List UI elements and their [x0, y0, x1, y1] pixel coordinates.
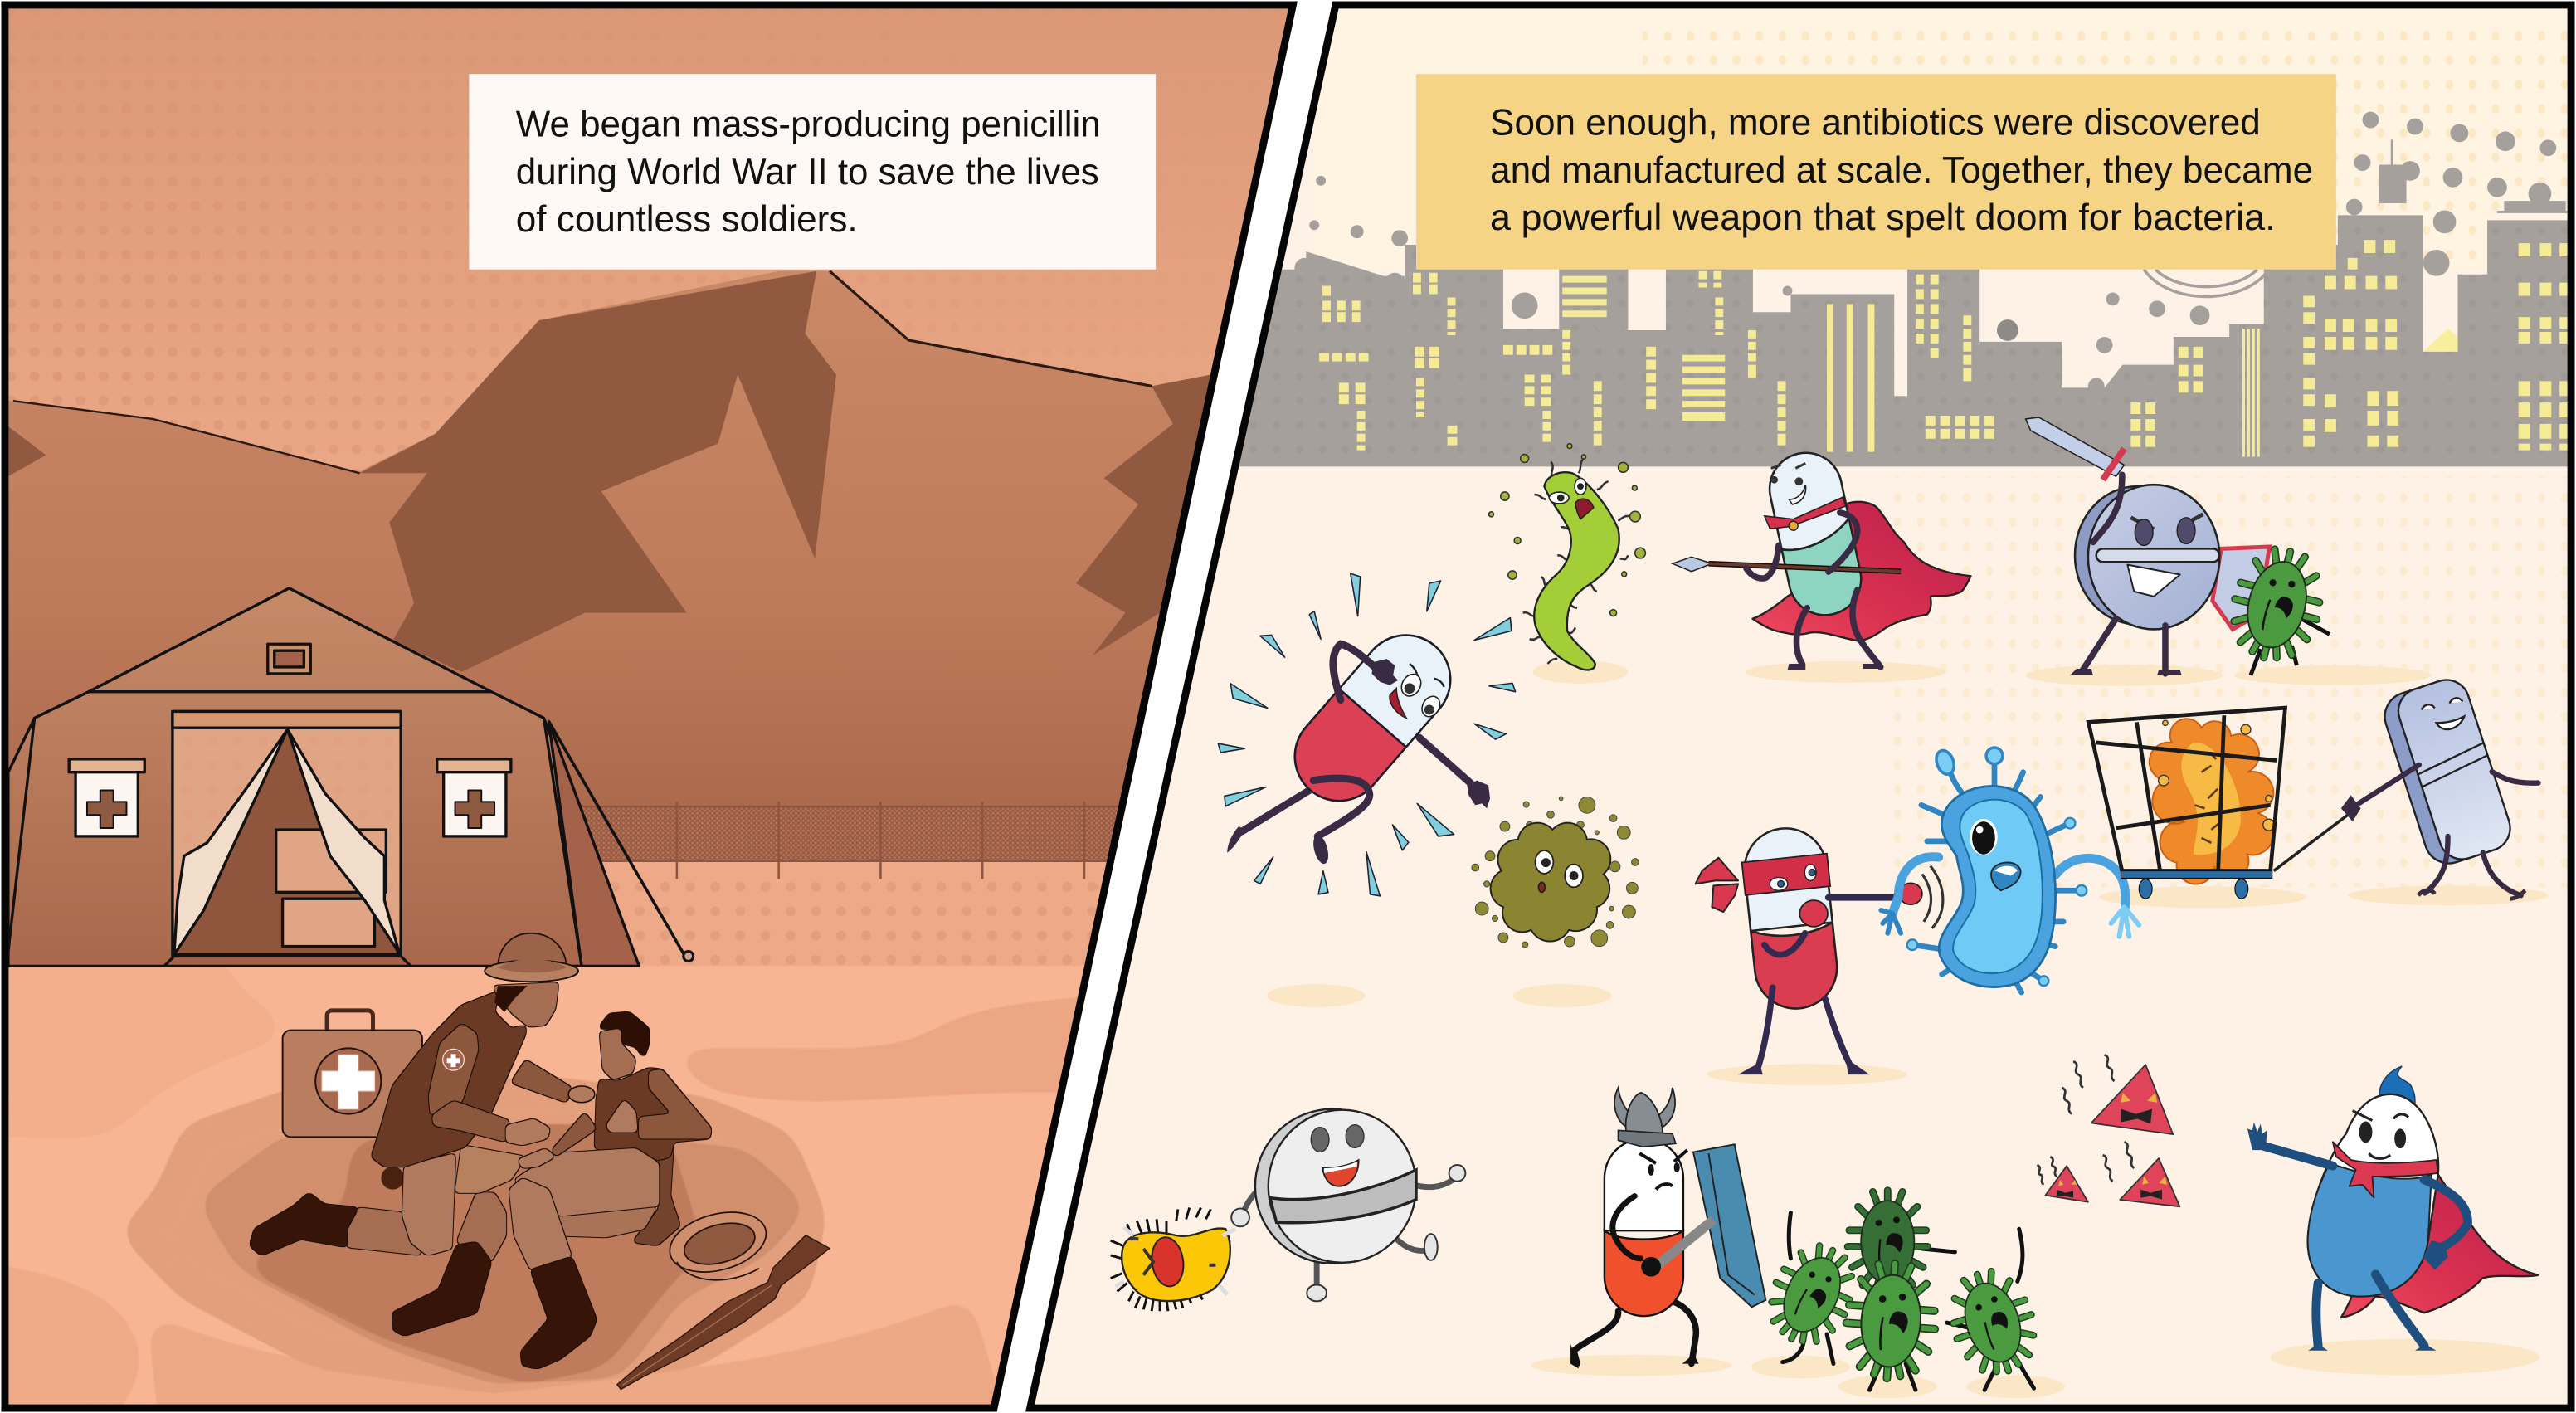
face: [2127, 514, 2203, 597]
green germ left: [1757, 1235, 1867, 1355]
foreground sand: [8, 966, 1084, 1405]
limbs: [1244, 1176, 1458, 1289]
helmet: [1614, 1088, 1676, 1147]
caption text: a powerful weapon that spelt doom for bacteria.: [1490, 197, 2276, 238]
sky with halftone dots: [0, 0, 1298, 493]
hands and shoes: [1231, 1165, 1465, 1301]
door: [164, 711, 411, 966]
character: viking capsule with shield: [1570, 1088, 1765, 1369]
city skyline: [1215, 112, 2576, 466]
limbs: [1758, 898, 1897, 1068]
tablet body: [2379, 674, 2516, 870]
caption text: [1490, 102, 2313, 238]
character: olive germ: [1472, 797, 1639, 948]
wiggle lines: [2037, 1055, 2134, 1185]
character: green rod bacterium: [1488, 444, 1645, 670]
particles: [1488, 444, 1645, 616]
tent body: [8, 588, 639, 966]
tent vent: [268, 644, 310, 674]
character: spear capsule with cape: [1673, 446, 1970, 670]
tablet body: [2075, 485, 2219, 629]
spikes and antennae: [1907, 748, 2087, 992]
faces: [2057, 1093, 2167, 1200]
germ legs: [1783, 1212, 2034, 1390]
cape: [1753, 502, 1970, 641]
caption box: antibiotics: [1416, 74, 2336, 270]
smoke puffs: [1294, 112, 2556, 394]
hands: [1881, 907, 2139, 937]
shin and boot: [509, 1178, 572, 1270]
eyes and mouth: [1536, 850, 1583, 892]
tent rope and peg: [548, 721, 694, 961]
limbs: [1892, 857, 2126, 914]
face: [1549, 478, 1594, 519]
triangles: [2045, 1065, 2179, 1206]
face: [1639, 1150, 1687, 1190]
chain-link fence: [567, 802, 1125, 879]
panel: wartime field hospital: [0, 0, 1298, 1413]
eye and mouth: [1970, 819, 2021, 890]
collar and brooch: [1765, 497, 1846, 529]
head: [598, 1012, 649, 1058]
sleeve with badge: [429, 1024, 478, 1116]
mountain range: [5, 271, 1249, 821]
vest: [372, 991, 526, 1167]
sword and arm: [1613, 1196, 1713, 1277]
body: [1739, 824, 1843, 1013]
caption box: penicillin: [469, 74, 1156, 270]
lit windows: [1319, 240, 2571, 457]
body: [1605, 1138, 1683, 1316]
arms and legs: [2261, 1145, 2467, 1346]
medic soldier: [250, 933, 595, 1255]
other leg and boot: [457, 1193, 506, 1262]
shield: [1693, 1144, 1765, 1307]
small germ: [2223, 542, 2331, 675]
green germ centre: [1843, 1260, 1939, 1381]
bumpy body: [1491, 823, 1610, 942]
character: blue bacterium: [1881, 748, 2139, 992]
shield: [2213, 547, 2269, 629]
character: tablet pulling cage with orange germ: [2088, 674, 2538, 899]
desert ground band: [602, 862, 1107, 966]
back boot and leg: [381, 1167, 404, 1190]
face: [2353, 1111, 2408, 1158]
eyes: [1770, 865, 1816, 890]
thigh: [514, 1148, 659, 1216]
ground shadows: [1267, 660, 2548, 1398]
boxing gloves: [1899, 883, 1922, 904]
green germ right: [1940, 1263, 2046, 1383]
water tower and rooftop rail: [2380, 139, 2569, 212]
face: [1390, 664, 1444, 720]
rifle: [617, 1235, 830, 1389]
ground shadow layers: [119, 1076, 826, 1393]
shards: [1218, 573, 1516, 896]
caption text: during World War II to save the lives: [516, 152, 1099, 192]
wounded soldier: [392, 1012, 711, 1369]
body: [2308, 1094, 2438, 1297]
tent: [7, 588, 639, 966]
limbs: [1746, 513, 1881, 667]
capsule body: [1277, 617, 1468, 819]
character: blue hero capsule with cape: [2247, 1066, 2538, 1351]
frame: right panel outline: [1030, 5, 2571, 1408]
face: [1770, 463, 1806, 504]
thigh: [402, 1153, 455, 1255]
legs: [1574, 1298, 1696, 1364]
character: armoured round tablet with sword: [2026, 417, 2331, 675]
hair tuft: [2379, 1066, 2415, 1104]
helmet: [485, 933, 578, 982]
arms and hands: [552, 1113, 597, 1157]
limbs behind: [1242, 738, 1478, 831]
caption text: of countless soldiers.: [516, 199, 858, 240]
spear: [1673, 557, 1901, 572]
scarf: [2333, 1142, 2438, 1198]
right window: [437, 759, 511, 836]
character group: green germs: [1757, 1191, 2046, 1390]
limbs: [2352, 765, 2538, 895]
torso: [595, 1068, 711, 1160]
cage: [2088, 708, 2285, 871]
punch impact lines: [1922, 866, 1943, 928]
frame: left panel outline: [5, 5, 1293, 1408]
yellow germ: [1111, 1207, 1235, 1311]
character: jumping capsule with shards: [1218, 573, 1516, 896]
sword: [2026, 417, 2124, 480]
body: [1763, 446, 1867, 621]
fallen helmet: [663, 1202, 772, 1282]
caption text: and manufactured at scale. Together, they became: [1490, 150, 2313, 191]
face: [2422, 698, 2464, 729]
cape: [2341, 1163, 2538, 1318]
body: [1939, 787, 2056, 987]
panel: antibiotics versus bacteria: [1019, 0, 2576, 1413]
character: red triangle germs: [2037, 1055, 2179, 1206]
olive spores: [1472, 797, 1639, 948]
caption text: We began mass-producing penicillin: [516, 104, 1101, 144]
wiggly hairs: [1523, 458, 1629, 664]
tablet body: [1255, 1109, 1416, 1264]
limbs: [2082, 475, 2165, 674]
cart base and wheels: [2121, 871, 2272, 899]
cloak tail: [632, 1142, 680, 1245]
face: [493, 982, 558, 1027]
left window: [69, 759, 144, 836]
limbs front: [1313, 644, 1376, 836]
caption text: [516, 104, 1101, 240]
character: round white tablet with yellow germ: [1111, 1109, 1465, 1311]
sky and ground background: [1019, 0, 2576, 1413]
face: [1311, 1125, 1364, 1186]
reaching arm and hand: [511, 1060, 572, 1103]
first aid kit: [283, 1011, 422, 1137]
orange germ: [2150, 719, 2275, 884]
smoke arc: [2144, 270, 2269, 296]
body: [1534, 472, 1619, 670]
dark germ behind: [1848, 1191, 1927, 1294]
trousers: [559, 1207, 655, 1238]
caption text: Soon enough, more antibiotics were discovered: [1490, 102, 2261, 143]
forearm and fist: [432, 1101, 509, 1142]
headband tails: [1696, 858, 1738, 912]
character: ninja capsule: [1696, 824, 1922, 1074]
pull handle: [2274, 811, 2352, 871]
